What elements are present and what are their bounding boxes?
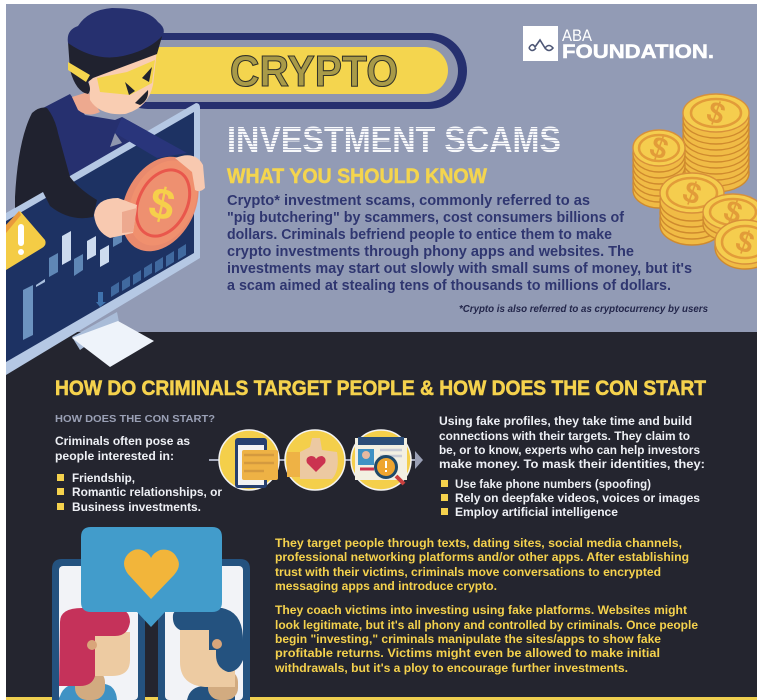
connector arrow	[209, 451, 423, 469]
bullet list: tools: Use fake phone numbers (spoofing)	[455, 477, 651, 491]
coin stack: back right: $	[702, 95, 730, 132]
bullet list: tools: Employ artificial intelligence	[455, 505, 618, 519]
torso	[44, 94, 148, 176]
coin stack: front	[660, 173, 724, 245]
text block: targeting: professional networking platforms and/or other apps. After establishing	[275, 550, 689, 564]
eyes and mouth	[125, 67, 152, 105]
text block: fake profiles	[439, 414, 705, 471]
bullet list: tools	[441, 477, 700, 519]
bullet list: interests: Business investments.	[72, 500, 201, 514]
coin stack: back right	[683, 94, 749, 192]
icon: phone messages	[219, 430, 279, 490]
speech bubble with heart	[81, 527, 222, 627]
icon: fake profile warning	[351, 430, 411, 490]
text block: fake profiles: be, or to know, experts who can help investors	[439, 443, 700, 457]
icon: warning triangle	[6, 211, 46, 270]
text block: coaching: look legitimate, but it's all phony and controlled by criminals. Once people	[275, 618, 698, 632]
text block: targeting: They target people through texts, dating sites, social media channels,	[275, 536, 682, 550]
head	[68, 8, 164, 115]
coin stack: right	[702, 193, 757, 238]
text block: coaching: withdrawals, but it's a ploy to encourage further investments.	[274, 661, 628, 675]
panel: dark lower background	[6, 332, 757, 700]
monitor	[6, 103, 200, 375]
monitor chart bars	[23, 231, 186, 340]
bullet list: tools: Rely on deepfake videos, voices or images	[455, 491, 700, 505]
left phone	[52, 559, 145, 700]
title pill: CRYPTO	[110, 33, 467, 109]
text block: targeting: messaging apps and introduce crypto.	[275, 579, 497, 593]
text block: coaching: begin "investing," criminals manipulate the sites/apps to show fake	[275, 632, 661, 646]
icon: thumbs up heart	[285, 430, 345, 490]
gray gap beneath arm	[110, 133, 122, 147]
text block: coaching	[274, 603, 698, 675]
subheading: how does the con start: HOW DOES THE CON START?	[55, 413, 215, 425]
coin: front right	[714, 219, 757, 270]
subheading: what you should know: WHAT YOU SHOULD KNOW	[227, 165, 487, 188]
text block: pose as: Criminals often pose as	[55, 434, 190, 448]
text block: coaching: profitable returns. Victims might even be allowed to make initial	[275, 646, 660, 660]
coin: front right: $	[731, 224, 759, 261]
text block: intro paragraph: a scam aimed at stealing tens of thousands to millions of dollars.	[227, 278, 671, 294]
left arm sleeve	[15, 108, 97, 218]
bullet list: interests	[57, 473, 222, 511]
title pill: CRYPTO: CRYPTO	[230, 47, 398, 96]
coin stack: back left: $	[645, 130, 673, 167]
section heading: how do criminals target people: HOW DO CRIMINALS TARGET PEOPLE & HOW DOES THE CON START	[55, 377, 706, 400]
text block: pose as	[55, 434, 190, 463]
text block: targeting	[275, 536, 689, 593]
illustration: scammer leaning over monitor	[6, 8, 214, 375]
icon: dollar coin: $	[145, 178, 179, 231]
coin stack: front: $	[678, 175, 706, 212]
mask	[68, 60, 155, 95]
text block: fake profiles: connections with their targets. They claim to	[439, 429, 690, 443]
text block: intro paragraph	[227, 193, 692, 294]
woman figure	[59, 608, 130, 700]
monitor stand	[72, 312, 154, 367]
logo: ABA Foundation: ABA	[562, 26, 593, 45]
text block: targeting: trust with their victims, criminals move conversations to encrypted	[275, 565, 661, 579]
face	[88, 50, 157, 114]
footnote: *Crypto is also referred to as cryptocurrency by users	[459, 304, 708, 315]
logo: ABA Foundation	[523, 26, 714, 63]
text block: intro paragraph: "pig butchering" by scammers, cost consumers billions of	[227, 210, 624, 226]
yellow bottom stripe	[6, 697, 757, 700]
bullet list: interests: Romantic relationships, or	[72, 485, 222, 499]
text block: fake profiles: make money. To mask their identities, they:	[439, 457, 705, 471]
text block: coaching: They coach victims into investing using fake platforms. Websites might	[275, 603, 687, 617]
text block: intro paragraph: crypto investments through phony apps and websites. The	[227, 244, 634, 260]
right arm	[115, 117, 187, 158]
text block: intro paragraph: investments may start out slowly with small sums of money, but it's	[227, 261, 692, 277]
heading: investment scams: INVESTMENT SCAMS	[227, 119, 561, 160]
text block: pose as: people interested in:	[55, 449, 174, 463]
ear	[72, 92, 100, 115]
right phone	[158, 559, 250, 700]
hair	[68, 8, 164, 57]
icon: coin stacks	[633, 94, 770, 269]
coin stack: right: $	[719, 194, 747, 231]
text block: intro paragraph: Crypto* investment scams, commonly referred to as	[227, 193, 590, 209]
panel: header background	[6, 4, 757, 332]
man figure	[173, 608, 243, 700]
under hair	[68, 33, 163, 94]
text block: intro paragraph: dollars. Criminals befriend people to entice them to make	[227, 227, 612, 243]
icon: dollar coin	[124, 156, 199, 252]
coin stack: back left	[633, 130, 685, 208]
text block: fake profiles: Using fake profiles, they take time and build	[439, 414, 692, 428]
bullet list: interests: Friendship,	[72, 471, 135, 485]
illustration: two phones with heart bubble	[52, 527, 250, 700]
logo: ABA Foundation: FOUNDATION.	[562, 41, 714, 63]
hands	[94, 155, 205, 238]
